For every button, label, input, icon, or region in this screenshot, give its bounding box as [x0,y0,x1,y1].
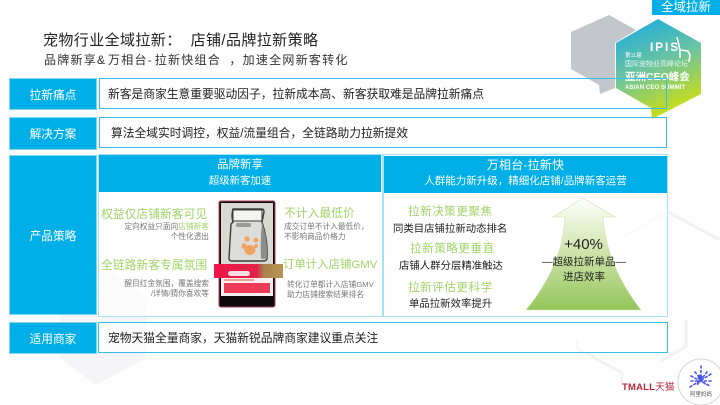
feature: 拉新决策更聚焦: 同类目店铺拉新动态排名 [393,224,507,235]
feature: 拉新评估更科学 [408,281,493,310]
feature: 拉新决策更聚焦: 拉新决策更聚焦 [408,205,493,218]
benefit: 不计入最低价 [284,206,369,241]
logo: 阿里妈妈 [678,358,720,405]
logo: TMALL: TMALL天猫 [622,382,675,393]
label: 适用商家: 适用商家 [30,332,76,346]
label: 解决方案: 解决方案 [30,128,76,141]
subtitle: 品牌新享&万相台-拉新快组合 ，加速全网新客转化 [44,53,349,67]
header: 品牌新享: 品牌新享 [217,159,263,171]
header: 品牌新享: 超级新客加速 [209,176,271,187]
benefit: 权益仅店铺新客可见: 权益仅店铺新客可见 [101,207,207,221]
benefit: 全链路新客专属氛围 [101,258,209,298]
header: 万相台-拉新快 [384,156,667,193]
benefit: 权益仅店铺新客可见: 个性化透出 [171,232,209,241]
feature: 拉新评估更科学: 拉新评估更科学 [408,281,493,294]
logo: IPIS summit hexagons: 第11届 [625,51,642,59]
benefit: 全链路新客专属氛围: 全链路新客专属氛围 [101,258,207,272]
label: 拉新痛点 [9,78,97,110]
benefit: 全链路新客专属氛围: /详情/猜你喜欢等 [151,289,209,298]
arrow: growth arrow [526,198,642,310]
benefit: 不计入最低价: 成交订单不计入最低价， [284,222,369,231]
callout: +40% efficiency: —超级拉新单品— [542,256,626,268]
header: 万相台-拉新快: 万相台-拉新快 [487,158,564,172]
benefit: 订单计入店铺GMV [283,258,378,299]
header: 品牌新享 [99,155,381,192]
logo: IPIS summit hexagons: ASIAN CEO SUMMIT [625,85,686,91]
label: 产品策略 [9,155,97,315]
label: 适用商家 [9,322,97,354]
text box: applicable merchants: 宠物天猫全量商家，天猫新锐品牌商家建议重点关注 [108,332,378,345]
corner tag: 全域拉新 [661,0,711,14]
callout: +40% efficiency: +40% [564,236,603,253]
phone mockup with pet food bag [214,200,283,308]
header: 万相台-拉新快: 人群能力新升级，精细化店铺/品牌新客运营 [424,175,627,187]
text box: pain point [99,78,667,109]
label: 拉新痛点: 拉新痛点 [30,88,76,102]
label: 产品策略: 产品策略 [30,230,76,242]
text box: solution [99,117,667,148]
benefit: 订单计入店铺GMV: 订单计入店铺GMV [283,259,377,271]
benefit: 权益仅店铺新客可见 [101,207,209,241]
logo: IPIS summit hexagons: 国际宠物业高峰论坛 [625,59,688,68]
feature: 拉新策略更垂直: 店铺人群分层精准触达 [399,261,503,272]
panel: 品牌新享 [98,154,383,317]
feature: 拉新策略更垂直 [399,242,503,272]
title: 宠物行业全域拉新： 店铺/品牌拉新策略 [43,32,318,49]
text box: applicable merchants [98,322,668,353]
feature: 拉新决策更聚焦 [393,205,507,235]
benefit: 不计入最低价: 不计入最低价 [284,206,355,220]
benefit: 订单计入店铺GMV: 转化订单都计入店铺GMV [287,280,374,289]
logo: IPIS summit hexagons [571,15,701,119]
logo: 阿里妈妈: 阿里妈妈 [690,390,712,398]
benefit: 订单计入店铺GMV: 助力店铺搜索结果排名 [287,290,364,299]
callout: +40% efficiency [542,236,626,283]
logo: IPIS summit hexagons: 亚洲CEO峰会 [625,70,690,83]
benefit: 权益仅店铺新客可见: 定向权益只面向店铺新客 [124,222,209,231]
corner tag [652,0,720,15]
callout: +40% efficiency: 进店效率 [563,271,605,283]
label: 解决方案 [9,117,97,150]
feature: 拉新评估更科学: 单品拉新效率提升 [409,299,492,310]
logo: IPIS summit hexagons: IPIS [650,40,680,54]
text box: solution: 算法全域实时调控，权益/流量组合，全链路助力拉新提效 [111,127,408,140]
feature: 拉新策略更垂直: 拉新策略更垂直 [410,242,495,255]
benefit: 不计入最低价: 不影响商品价格力 [284,232,346,241]
text box: pain point: 新客是商家生意重要驱动因子，拉新成本高、新客获取难是品牌拉新痛点 [108,88,484,101]
benefit: 全链路新客专属氛围: 醒目红金氛围，覆盖搜索 [124,279,209,288]
panel: 万相台-拉新快 [383,154,668,317]
